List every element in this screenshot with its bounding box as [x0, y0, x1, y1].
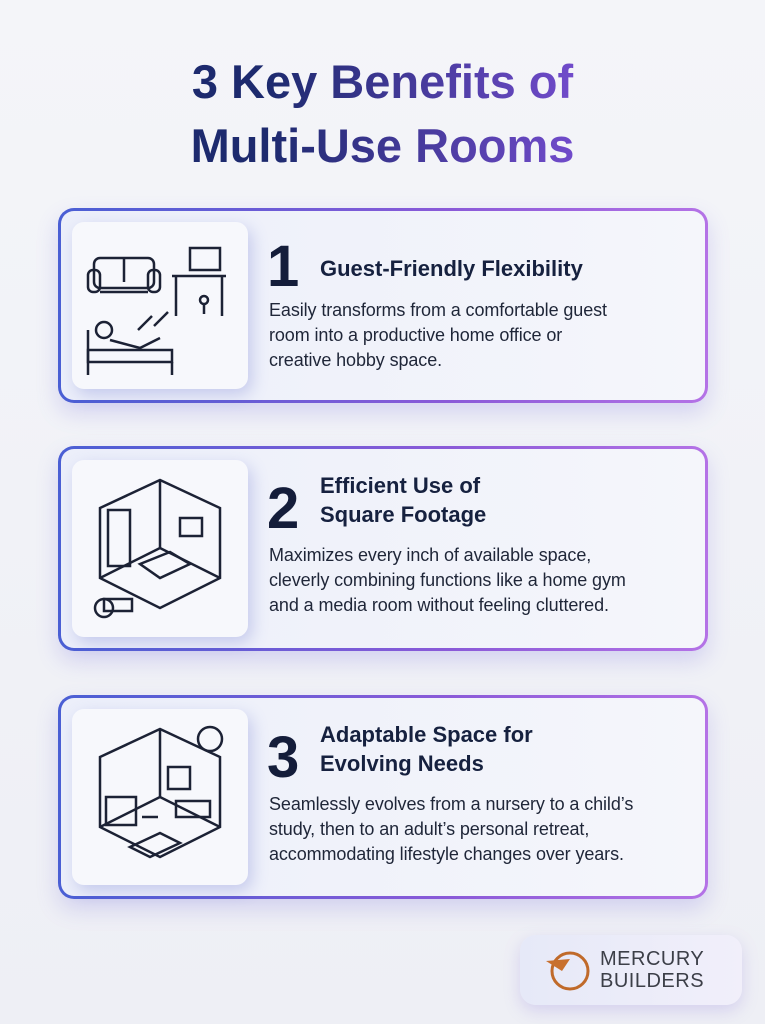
text — [269, 545, 626, 615]
title — [0, 50, 765, 178]
panel: benefit 3 — [58, 695, 708, 899]
panel: benefit 2: 2 — [267, 476, 299, 541]
text — [269, 794, 633, 864]
heading: Adaptable Space for — [320, 722, 533, 747]
text: room into a productive home office or — [269, 325, 562, 345]
text: study, then to an adult’s personal retreat, — [269, 819, 589, 839]
text: and a media room without feeling cluttered. — [269, 595, 609, 615]
logo: Mercury Builders: BUILDERS — [600, 970, 704, 992]
panel: benefit 1 — [58, 208, 708, 403]
text: Seamlessly evolves from a nursery to a child’s — [269, 794, 633, 814]
heading: Evolving Needs — [320, 751, 484, 776]
text: Maximizes every inch of available space, — [269, 545, 591, 565]
text: cleverly combining functions like a home gym — [269, 570, 626, 590]
text: Easily transforms from a comfortable guest — [269, 300, 607, 320]
panel: benefit 1: 1 — [267, 234, 299, 299]
panel: benefit 2 — [58, 446, 708, 651]
heading: Guest-Friendly Flexibility — [320, 256, 583, 281]
icon: evolving room — [72, 709, 248, 885]
heading: Square Footage — [320, 502, 486, 527]
panel: benefit 3: 3 — [267, 725, 299, 790]
icon: winged helmet — [546, 952, 590, 990]
heading — [320, 473, 486, 527]
text — [269, 300, 607, 370]
icon: guest room to office — [72, 222, 248, 389]
logo: Mercury Builders — [520, 935, 742, 1005]
text: creative hobby space. — [269, 350, 442, 370]
text: accommodating lifestyle changes over years. — [269, 844, 624, 864]
heading — [320, 722, 533, 776]
heading: Efficient Use of — [320, 473, 480, 498]
logo: Mercury Builders: MERCURY — [600, 948, 704, 970]
title: 3 Key Benefits of — [192, 55, 573, 108]
icon: compact room — [72, 460, 248, 637]
title: Multi-Use Rooms — [191, 119, 574, 172]
